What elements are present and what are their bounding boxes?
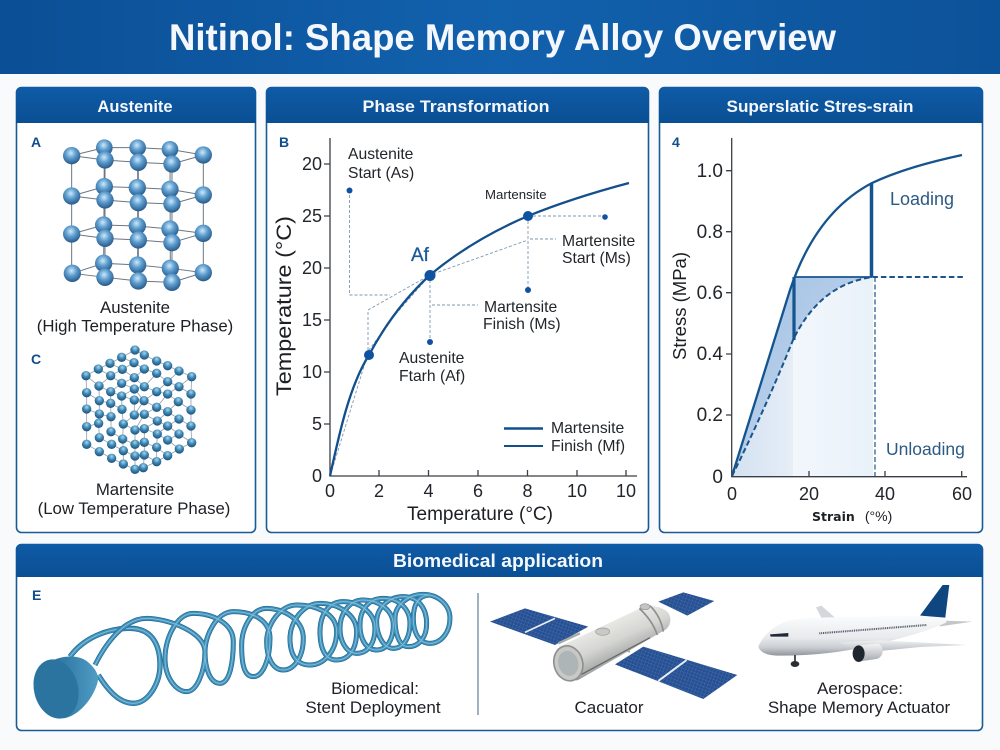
label: loading: Loading — [890, 189, 954, 209]
caption: martensite: (Low Temperature Phase) — [38, 499, 230, 518]
rear wing — [816, 606, 837, 622]
y axis title: Temperature (°C) — [273, 216, 296, 396]
fuselage — [758, 616, 947, 656]
shaded areas — [732, 340, 793, 476]
axes — [726, 138, 967, 477]
panel: austenite and martensite crystal structures — [16, 87, 256, 532]
caption: aerospace: Aerospace: — [817, 679, 903, 698]
tail fin — [920, 585, 949, 618]
caption: aerospace: Shape Memory Actuator — [768, 698, 951, 717]
chart: stress-strain: 0.2 — [697, 405, 723, 426]
chart: stress-strain: 20 — [799, 484, 819, 504]
solar panels — [490, 608, 588, 645]
x axis title: (°%) — [861, 508, 892, 524]
chart: stress-strain: 0 — [712, 467, 723, 488]
annotation: martensite finish: Martensite — [484, 299, 558, 316]
heading: Superslatic Stres-srain: Superslatic Stres-srain — [726, 97, 914, 116]
caption: stent: Stent Deployment — [305, 698, 441, 717]
y tick labels: 10 — [302, 362, 322, 382]
landing gear — [792, 655, 798, 662]
panel: superelastic stress-strain — [659, 87, 983, 532]
annotation: martensite: Martensite — [485, 187, 547, 202]
caption: austenite: (High Temperature Phase) — [37, 316, 233, 336]
label: unloading: Unloading — [886, 439, 965, 459]
panel: phase transformation — [266, 87, 649, 532]
y tick labels: 1.0 — [697, 161, 723, 182]
annotation: martensite start: Martensite — [562, 233, 636, 250]
label C: C — [31, 351, 41, 367]
panel: biomedical application — [16, 544, 983, 730]
y tick labels: 5 — [312, 414, 322, 434]
caption: martensite: Martensite — [96, 480, 174, 499]
heading: Austenite: Austenite — [97, 98, 173, 116]
icon: austenite lattice — [63, 139, 212, 291]
y axis title: Stress (MPa) — [670, 252, 690, 360]
chart: stress-strain — [670, 138, 972, 524]
annotation: austenite start: Start (As) — [348, 165, 414, 182]
axes — [324, 138, 637, 476]
body — [555, 606, 670, 680]
chart: stress-strain: 0.4 — [697, 344, 723, 365]
x tick labels: 6 — [473, 481, 483, 501]
chart: stress-strain: 40 — [875, 484, 895, 504]
data points — [346, 188, 608, 360]
annotation: austenite finish: Ftarh (Af) — [399, 368, 465, 385]
y tick labels: 20 — [302, 258, 322, 278]
heading: Biomedical application: Biomedical application — [393, 551, 603, 571]
chart: temperature curve — [273, 138, 637, 525]
y tick labels: 20 — [302, 154, 322, 174]
legend: Martensite — [551, 420, 625, 437]
x tick labels: 4 — [423, 481, 434, 501]
legend: Finish (Mf) — [551, 438, 625, 455]
icon: nitinol stent coil — [27, 594, 450, 723]
x axis title: Strain — [812, 509, 855, 524]
chart: stress-strain: 0.8 — [697, 222, 723, 243]
icon: airplane — [758, 585, 973, 667]
x tick labels: 10 — [616, 481, 636, 501]
loading curve — [732, 155, 962, 476]
x tick labels — [325, 481, 636, 501]
icon: satellite — [490, 592, 737, 699]
x tick labels: 0 — [727, 484, 737, 504]
cone — [52, 656, 98, 718]
annotation: austenite start: Austenite — [348, 146, 414, 163]
x axis title: Temperature (°C) — [407, 504, 553, 525]
chart: stress-strain: 0.6 — [697, 283, 723, 304]
engine — [857, 644, 883, 662]
caption: satellite: Cacuator — [575, 698, 644, 717]
caption: stent: Biomedical: — [331, 679, 419, 698]
chart: stress-strain: 60 — [952, 484, 972, 504]
x tick labels: 2 — [374, 481, 384, 501]
annotation: martensite finish: Finish (Ms) — [483, 316, 561, 333]
title: Nitinol: Shape Memory Alloy Overview — [169, 17, 836, 58]
annotation: Af: Af — [411, 245, 430, 266]
label 4: 4 — [672, 134, 680, 150]
divider — [477, 593, 479, 715]
label A: A — [31, 134, 41, 150]
leader lines — [332, 190, 605, 470]
title banner — [0, 0, 1000, 74]
y tick labels: 25 — [302, 206, 322, 226]
cockpit windows — [770, 633, 788, 637]
x tick labels: 0 — [325, 481, 335, 501]
icon: martensite lattice — [81, 345, 196, 474]
annotation: austenite finish: Austenite — [399, 350, 465, 367]
y tick labels: 0 — [312, 466, 322, 486]
annotation: martensite start: Start (Ms) — [562, 250, 631, 267]
heading: Phase Transformation: Phase Transformation — [362, 97, 550, 116]
legend — [504, 420, 625, 455]
transformation curve — [330, 183, 629, 476]
x tick labels: 10 — [567, 481, 587, 501]
label B: B — [279, 134, 289, 150]
caption: austenite: Austenite — [100, 298, 170, 317]
plateau and vertical markers — [794, 276, 872, 278]
label E: E — [32, 587, 41, 603]
x tick labels: 8 — [522, 481, 533, 501]
unloading curve — [732, 277, 963, 476]
y tick labels — [302, 154, 322, 486]
wing — [840, 640, 967, 651]
y tick labels: 15 — [302, 310, 322, 330]
